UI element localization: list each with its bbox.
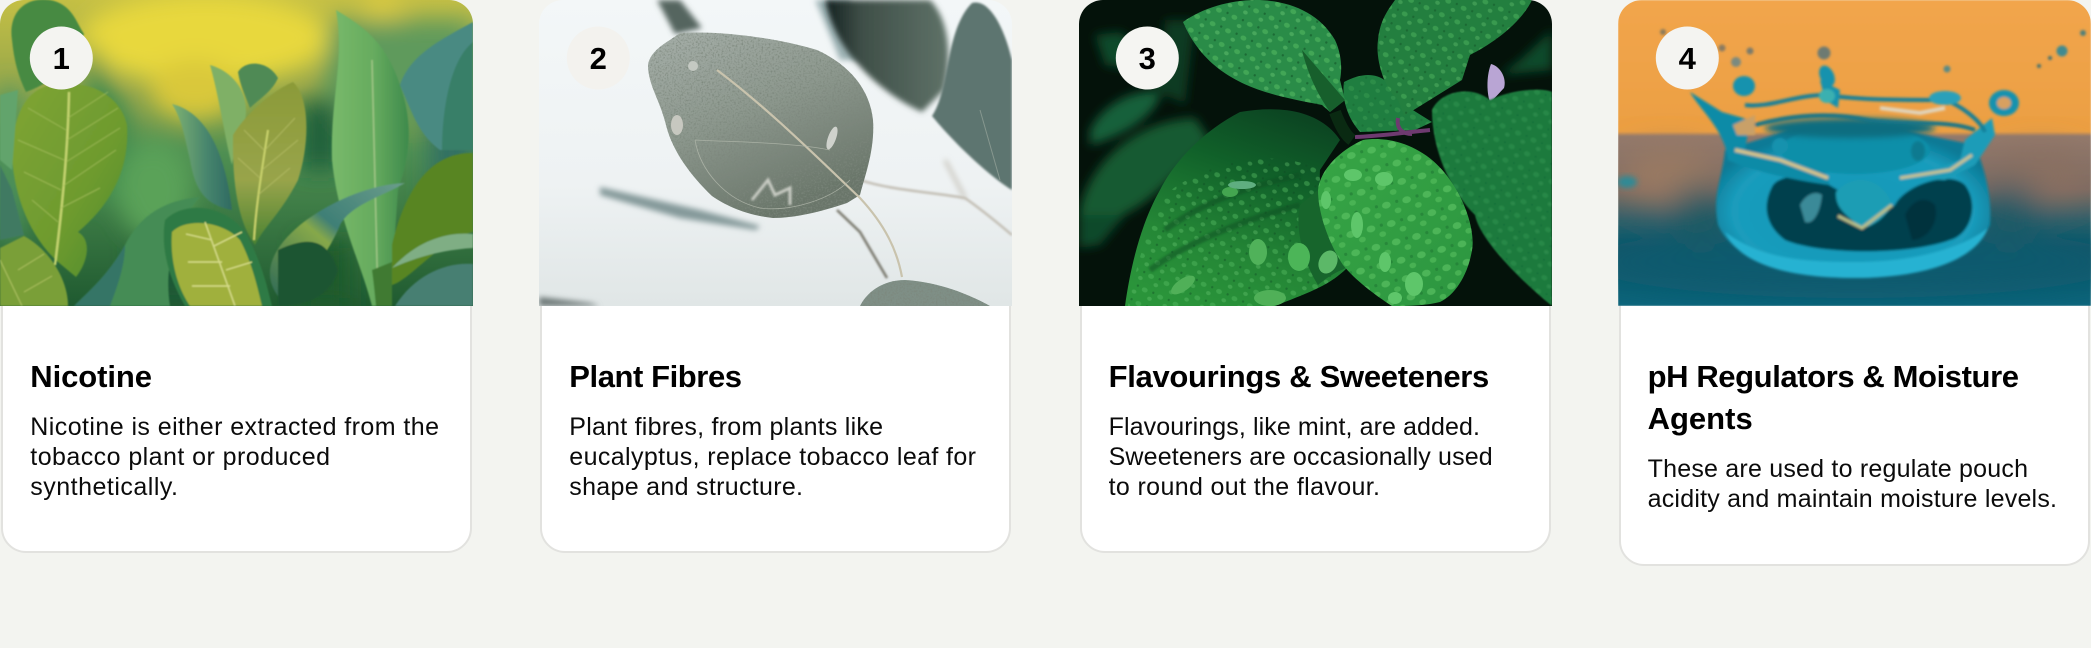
circle number 3 bbox=[1116, 26, 1179, 90]
right big leaf bbox=[1432, 90, 1552, 306]
lower left leaf bbox=[1125, 109, 1347, 306]
body text: Flavourings and Sweeteners: Flavourings, like mint, are added. bbox=[1109, 413, 1480, 441]
photo: green leaves with water drops bbox=[1079, 0, 1552, 306]
right tall leaf bbox=[332, 10, 409, 306]
body text: pH Regulators and Moisture Agents: These are used to regulate pouch bbox=[1648, 455, 2028, 483]
circle number 4 bbox=[1656, 26, 1719, 90]
body text: Nicotine bbox=[30, 413, 439, 501]
circle number 1: 1 bbox=[53, 41, 70, 76]
body text: Nicotine: Nicotine is either extracted from the bbox=[30, 413, 439, 441]
center olive leaf bbox=[233, 82, 306, 245]
bottom-left leaf bbox=[0, 236, 68, 306]
circle number 3: 3 bbox=[1139, 41, 1156, 76]
heading: Plant Fibres: Plant Fibres bbox=[569, 359, 742, 394]
heading: pH Regulators and Moisture Agents: Agents bbox=[1648, 401, 1753, 436]
body text: Plant Fibres: Plant fibres, from plants like bbox=[569, 413, 883, 441]
bud bbox=[238, 64, 278, 108]
central peak bbox=[1834, 188, 1891, 228]
tip leaf bbox=[210, 65, 246, 165]
body text: Flavourings and Sweeteners bbox=[1109, 413, 1493, 501]
purple petal bbox=[1487, 64, 1505, 103]
body text: Plant Fibres: eucalyptus, replace tobacco leaf for bbox=[569, 443, 976, 471]
bottom rim light bbox=[1725, 228, 1988, 278]
body text: Nicotine: tobacco plant or produced bbox=[30, 443, 330, 471]
circle number 1 bbox=[30, 26, 93, 90]
panel: card 2 Plant Fibres bbox=[539, 0, 1012, 552]
right leaf bbox=[932, 2, 1012, 190]
circle number 2 bbox=[567, 26, 630, 90]
middle back leaf bbox=[1343, 75, 1432, 132]
splash fingers and droplets bbox=[1660, 29, 2086, 161]
circle number 4: 4 bbox=[1679, 41, 1697, 76]
right olive leaf bbox=[392, 153, 473, 285]
panel: card 1 Nicotine bbox=[0, 0, 473, 552]
water body bbox=[1716, 130, 1990, 278]
inner dark cavity bbox=[1767, 177, 1972, 251]
circle number 2: 2 bbox=[590, 41, 607, 76]
bottom center leaf bbox=[164, 208, 272, 306]
crown right wall bbox=[1900, 118, 1995, 180]
body text: Nicotine: synthetically. bbox=[30, 473, 178, 501]
crown left wall bbox=[1690, 92, 1830, 185]
purple stems bbox=[1355, 118, 1430, 137]
big drops bbox=[1168, 181, 1341, 306]
center blue leaf bbox=[172, 104, 232, 210]
dark upper leaf bbox=[825, 0, 948, 112]
bottom leaf bbox=[860, 280, 990, 306]
bright center leaf bbox=[1318, 139, 1473, 306]
right wedge leaf bbox=[270, 183, 405, 296]
top right leaf bbox=[1377, 0, 1532, 116]
crown rim bbox=[1745, 95, 1985, 132]
heading: Flavourings and Sweeteners: Flavourings & Sweeteners bbox=[1109, 359, 1489, 394]
photo: blue water splash bbox=[1585, 0, 2091, 306]
main leaf bbox=[648, 32, 873, 218]
body text: Flavourings and Sweeteners: Sweeteners are occasionally used bbox=[1109, 443, 1493, 471]
top left leaf bbox=[1183, 0, 1345, 112]
photo: eucalyptus leaf bbox=[539, 0, 1012, 306]
body text: pH Regulators and Moisture Agents: acidity and maintain moisture levels. bbox=[1648, 485, 2057, 513]
heading: pH Regulators and Moisture Agents: pH Regulators & Moisture bbox=[1648, 359, 2019, 394]
body text: Plant Fibres bbox=[569, 413, 976, 501]
heading: Nicotine: Nicotine bbox=[30, 359, 152, 394]
far-right leaf bbox=[400, 22, 473, 150]
top-left leaf bbox=[11, 0, 84, 92]
panel: card 4 pH Regulators and Moisture Agents bbox=[1585, 0, 2091, 565]
body text: Plant Fibres: shape and structure. bbox=[569, 473, 803, 501]
large left leaf bbox=[12, 84, 127, 277]
panel: card 3 Flavourings and Sweeteners bbox=[1079, 0, 1552, 552]
heading: pH Regulators and Moisture Agents bbox=[1648, 359, 2019, 436]
bottom blue leaf bbox=[110, 198, 192, 306]
large drops on center leaf bbox=[1321, 169, 1423, 304]
body text: Flavourings and Sweeteners: to round out the flavour. bbox=[1109, 473, 1380, 501]
body text: pH Regulators and Moisture Agents bbox=[1648, 455, 2057, 513]
photo: tobacco plant leaves bbox=[0, 0, 473, 306]
inner pool bbox=[1782, 134, 1932, 174]
